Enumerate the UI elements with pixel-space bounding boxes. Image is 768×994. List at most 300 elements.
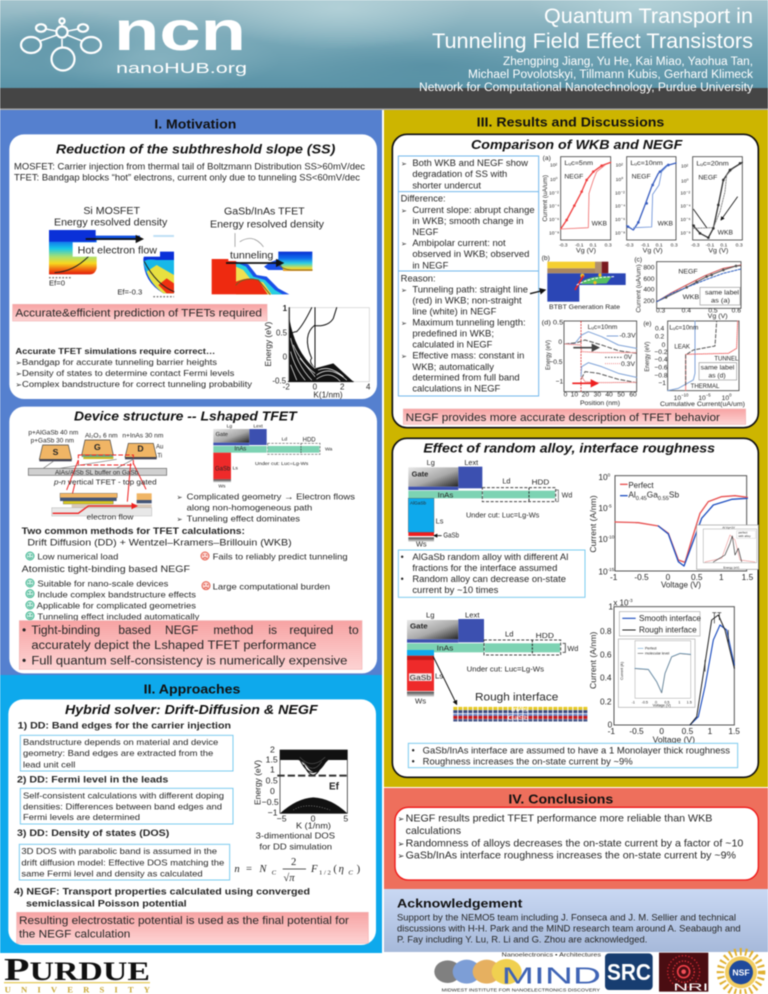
step 3: density of states: same Fermi level and density as calculated (21, 869, 203, 879)
legend (619, 612, 702, 636)
figure: L-shaped TFET geometry: Under cut: Luc=Lg-Ws (255, 461, 309, 467)
panel Luc=20nm: 10⁻² (680, 190, 691, 196)
chart: complex band structure: 1 (283, 304, 288, 313)
chart: current vs voltage, roughness: 1.5 (728, 726, 740, 736)
panel Luc=10nm: 0.3 (671, 243, 678, 249)
figure: vertical TFET schematic: Al₂O₃ 6 nm (85, 433, 118, 439)
chart (e): energy vs cumulative current: Cumulative Current(uA/um) (660, 401, 745, 408)
figure: GaSb L-shaped geometry: GaSb (410, 673, 431, 682)
step 2: Fermi level: Self-consistent calculations with different doping (23, 790, 224, 800)
figure: Si MOSFET energy resolved density: Hot electron flow (78, 245, 158, 256)
step 2: Fermi level: densities: Differences between band edges and (23, 801, 222, 811)
chart (e): energy vs cumulative current: 10 (722, 395, 729, 402)
panel Luc=10nm: 10² (616, 163, 623, 169)
logo: molecule icon (21, 18, 101, 70)
chart (e): energy vs cumulative current: same label (701, 364, 735, 371)
panel: II. Approaches (4, 681, 376, 994)
heading: I. Motivation: I. Motivation (154, 116, 236, 131)
chart: current vs voltage, roughness: Voltage (V) (653, 735, 695, 745)
text box: explanation: (red) in WKB; non-straight (412, 296, 522, 306)
step 2: Fermi level: Fermi levels are determined (23, 812, 140, 822)
chart: complex band structure: 0.5 (276, 329, 288, 338)
figure: AlGaSb L-shaped geometry (408, 458, 572, 549)
figure: rough interface lattice: GaSb (508, 715, 529, 722)
chart (a): current vs gate voltage (542, 155, 743, 255)
figure: GaSb/InAs TFET energy resolved density: GaSb/InAs TFET (224, 206, 305, 217)
text box: explanation: Reason: (401, 274, 436, 284)
chart (e): energy vs cumulative current: 0 (729, 393, 732, 398)
chart (c): current vs voltage: (c) (634, 257, 642, 264)
figure: vertical TFET schematic: p-n vertical TFET - top gated (53, 477, 157, 486)
panel: interface roughness (407, 598, 740, 768)
panel Luc=20nm: WKB (718, 229, 734, 236)
logo: NSF: NSF (732, 969, 750, 978)
inset: transmission spectrum: perfect (738, 530, 748, 534)
panel Luc=5nm: 10⁻⁴ (549, 204, 559, 210)
chart (e): energy vs cumulative current: −5 (706, 393, 711, 398)
callout: NEGF required: to (349, 623, 359, 637)
chart: current vs voltage, random alloy: 1.5 (742, 572, 754, 582)
figure: vertical TFET schematic: AlAs/AlSb SL buffer on GaSb (55, 470, 139, 476)
chart (c): current vs voltage: 0.6 (732, 307, 741, 314)
figure: GaSb L-shaped geometry: Ld (505, 630, 514, 639)
poster title: Quantum Transport in (544, 5, 753, 28)
chart: current vs voltage, random alloy: Perfect (628, 480, 654, 490)
callout: NEGF more accurate: NEGF provides more accurate description of TFET behavior (406, 412, 720, 424)
chart (d): energy vs position: Energy (eV) (545, 340, 552, 370)
chart (d): energy vs position: 0V (624, 354, 633, 361)
chart (d): energy vs position: −0.5 (549, 359, 563, 366)
panel Luc=10nm: -0.3 (625, 243, 634, 249)
panel Luc=10nm: 10⁻⁶ (615, 217, 625, 223)
chart (e): energy vs cumulative current: −0.4 (654, 356, 668, 363)
figure: GaSb L-shaped geometry: Under cut: Luc=Lg-Ws (467, 664, 544, 673)
figure: Si MOSFET energy resolved density: Si MOSFET (83, 206, 140, 217)
chart: current vs voltage, roughness: 0.2 (600, 696, 612, 706)
text box: roughness findings: • (412, 745, 415, 755)
panel Luc=20nm: 10⁻⁶ (680, 217, 691, 223)
chart: current vs voltage, roughness: -3 (628, 598, 633, 603)
figure: rough interface lattice: Rough interface (475, 692, 558, 704)
panel Luc=10nm: Vg (V) (643, 248, 663, 255)
panel Luc=10nm: 10⁰ (616, 177, 623, 183)
text box: roughness findings: Roughness increases the on-state current by ~9% (423, 756, 633, 766)
chart: band structure with Fermi level: for DD simulation (259, 841, 332, 851)
heading: IV. Conclusions: IV. Conclusions (508, 791, 613, 806)
callout: accurate prediction required: Accurate&efficient prediction of TFETs required (15, 308, 262, 320)
text: conclusions list: GaSb/InAs interface roughness increases the on-state current by ~9% (406, 851, 736, 862)
panel Luc=20nm: 10⁻⁸ (680, 230, 691, 236)
panel Luc=20nm: Lᵤc=20nm (696, 161, 729, 168)
step 3: density of states: 3D DOS with parabolic band is assumed in the (21, 846, 217, 856)
figure: vertical TFET schematic: G (94, 442, 101, 452)
chart: band structure with Fermi level: 1 (270, 765, 275, 775)
formula: carrier density: C (348, 870, 353, 877)
chart: current vs voltage, roughness: 0.4 (600, 673, 612, 683)
text: conclusions list: calculations (406, 826, 461, 837)
list: pros and cons: Suitable for nano-scale devices (37, 579, 168, 589)
panel Luc=20nm: 10⁰ (681, 178, 689, 184)
step 1: band edges: 1) DD: Band edges for the carrier injection (18, 720, 231, 730)
chart (c): current vs voltage: 0.3 (656, 307, 666, 314)
callout: NEGF required: Tight-binding (31, 623, 100, 637)
panel Luc=20nm: 0.3 (736, 243, 743, 249)
chart (c): current vs voltage: Vg (V) (708, 313, 728, 320)
figure: L-shaped TFET geometry: InAs (234, 447, 246, 453)
heading: reduction of the subthreshold slope: Reduction of the subthreshold slope (SS) (56, 142, 335, 157)
list: pros and cons (26, 552, 348, 622)
card: conclusions (395, 807, 758, 880)
callout: NEGF required: accurately depict the Lshaped TFET performance (31, 638, 317, 652)
panel: I. Motivation (9, 116, 377, 399)
panel Luc=5nm: 10⁰ (550, 177, 558, 183)
panel Luc=10nm: NEGF (632, 174, 651, 181)
heading: II. Approaches: II. Approaches (144, 681, 240, 696)
chart: current vs voltage, random alloy: 10 (598, 472, 608, 482)
text: conclusions list: Randomness of alloys decreases the on-state current by a factor of ~10 (406, 838, 744, 849)
logo: MIND: MIND (502, 962, 601, 988)
text: conclusions list (398, 814, 744, 862)
poster title: Tunneling Field Effect Transistors (432, 30, 753, 53)
text: MOSFET and TFET description: TFET: Bandgap blocks “hot” electrons, current only due to tunneling SS<60mV/dec (14, 173, 360, 183)
figure: vertical TFET schematic: Au (156, 444, 163, 450)
text box: explanation: in NEGF (412, 260, 449, 270)
chart: band structure with Fermi level: −0.5 (262, 797, 279, 807)
panel Luc=20nm: -0.3 (691, 243, 700, 249)
logo: MIND (434, 952, 601, 994)
logo: SRC (605, 953, 653, 990)
text: two common methods: Two common methods for TFET calculations: (22, 526, 245, 536)
figure: L-shaped TFET geometry: GaSb (215, 467, 231, 473)
text box: explanation: observed in WKB; observed (412, 249, 529, 259)
panel Luc=10nm: WKB (658, 221, 674, 228)
step 2: Fermi level (17, 775, 233, 824)
chart: current vs voltage, roughness: 0 (608, 719, 613, 729)
chart (e): energy vs cumulative current: 0 (662, 342, 666, 349)
step 4: NEGF (14, 886, 310, 909)
text: MOSFET and TFET description (14, 161, 365, 183)
panel Luc=5nm: 0.1 (590, 243, 597, 249)
chart: band structure with Fermi level: 5 (343, 814, 348, 824)
chart (e): energy vs cumulative current: 10 (698, 395, 706, 402)
panel Luc=5nm: Vg (V) (576, 248, 596, 255)
inset: perfect vs molecular level: Current (A) (620, 662, 624, 680)
figure: GaSb L-shaped geometry: Wd (567, 644, 578, 653)
text box: random alloy findings: AlGaSb random alloy with different Al (412, 552, 568, 562)
step 4: NEGF: semiclassical Poisson potential (26, 899, 187, 909)
figure: AlGaSb L-shaped geometry: InAs (438, 490, 454, 499)
figure: AlGaSb L-shaped geometry: Ls (436, 516, 444, 525)
text: MOSFET and TFET description: MOSFET: Carrier injection from thermal tail of Boltzmann Distribution SS>60mV/dec (14, 161, 365, 171)
text: simulation requirements: ➢Bandgap for accurate tunneling barrier heights (15, 357, 217, 367)
callout: accurate prediction required (13, 304, 267, 321)
callout: NEGF more accurate (403, 409, 746, 424)
formula: carrier density: F (310, 864, 318, 875)
text box: explanation: WKB; automatically (412, 362, 495, 372)
chart (e): energy vs cumulative current: LEAK (674, 344, 691, 351)
figure: AlGaSb L-shaped geometry: Gate (412, 470, 428, 479)
figure: vertical TFET schematic: D (137, 444, 144, 454)
text box: explanation: shorter undercut (412, 180, 482, 190)
inset: perfect vs molecular level: 1 (678, 700, 680, 704)
panel Luc=5nm: 10⁻⁸ (549, 230, 559, 236)
panel Luc=5nm: 10⁻² (549, 190, 559, 196)
figure: vertical TFET schematic: p+AlGaSb 40 nm (28, 430, 78, 436)
chart: current vs voltage, roughness: 1 (708, 726, 713, 736)
panel Luc=5nm: NEGF (564, 174, 583, 181)
chart: current vs voltage, random alloy: Current (A/nm) (588, 495, 598, 553)
chart (d): energy vs position: −1 (556, 378, 564, 385)
inset: perfect vs molecular level: 0.5 (664, 700, 669, 704)
figure: Si MOSFET energy resolved density: Ef=0 (49, 278, 65, 287)
text: acknowledgement: discussions with H-H. Park and the MIND research team around A. Seabaugh and (397, 923, 741, 933)
chart (e): energy vs cumulative current: −10 (681, 393, 689, 398)
chart: current vs voltage, roughness: 0.8 (600, 626, 612, 636)
chart (e): energy vs cumulative current: TUNNEL (714, 355, 739, 362)
inset: perfect vs molecular level: -1 (632, 700, 635, 704)
chart (c): current vs voltage: 0.4 (682, 307, 691, 314)
chart (d): energy vs position: Lᵤc=10nm (588, 324, 618, 331)
chart (c): current vs voltage: as (a) (711, 297, 730, 304)
text: conclusions list: ➢ (398, 815, 405, 824)
chart: current vs voltage, random alloy: Ga (647, 489, 658, 499)
heading: acknowledgement: Acknowledgement (397, 896, 522, 910)
chart: current vs voltage, random alloy: 10 (598, 566, 608, 576)
chart (c): current vs voltage: 200 (643, 298, 655, 305)
text: geometry bullets: Complicated geometry → Electron flows (187, 491, 356, 501)
text box: roughness findings: • (412, 756, 415, 766)
chart: current vs voltage, roughness: Current (A/nm) (588, 631, 598, 689)
panel Luc=20nm: Vg (V) (708, 248, 728, 255)
card: device structure (9, 407, 377, 673)
authors and affiliation: Michael Povolotskyi, Tillmann Kubis, Gerhard Klimeck (468, 69, 753, 81)
figure: L-shaped TFET geometry: Lg (227, 423, 232, 429)
text box: explanation: Both WKB and NEGF show (412, 158, 529, 168)
text box: explanation: ➢ (401, 207, 407, 215)
figure: vertical TFET schematic: electron flow (87, 512, 134, 521)
inset: perfect vs molecular level: 0 (655, 700, 657, 704)
panel: III. Results and Discussions (392, 116, 758, 428)
chart: current vs voltage, random alloy: Voltage (V) (661, 580, 701, 590)
chart (c): current vs voltage: NEGF (678, 268, 698, 275)
inset: perfect vs molecular level: molecular level (645, 652, 670, 656)
inset: perfect vs molecular level (618, 639, 695, 708)
figure: L-shaped TFET geometry (213, 423, 333, 489)
chart (b): BTBT generation rate (530, 255, 626, 311)
figure: GaSb L-shaped geometry: Gate (410, 621, 428, 630)
chart: current vs voltage, random alloy: -15 (608, 567, 615, 572)
text box: random alloy findings: Random alloy can decrease on-state (412, 574, 566, 584)
text box: explanation: Tunneling path: straight line (412, 285, 528, 295)
chart: current vs voltage, random alloy: 0 (608, 473, 611, 478)
text box: random alloy findings (398, 550, 585, 597)
chart: complex band structure: Energy (eV) (264, 321, 273, 367)
figure: AlGaSb L-shaped geometry: AlGaSb (410, 500, 426, 505)
step 3: density of states: drift diffusion model: Effective DOS matching the (21, 858, 225, 868)
chart (e): energy vs cumulative current: (e) (643, 320, 651, 327)
step 1: band edges: geometry: Band edges are extracted from the (23, 748, 214, 758)
figure: AlGaSb L-shaped geometry: GaSb (443, 530, 459, 539)
chart (e): energy vs cumulative current (643, 320, 745, 408)
chart: band structure with Fermi level: 0 (311, 814, 316, 824)
step 3: density of states (17, 828, 230, 880)
text: simulation requirements: ➢Density of states to determine contact Fermi levels (15, 368, 234, 378)
panel Luc=20nm: NEGF (698, 175, 717, 182)
chart (d): energy vs position (542, 319, 637, 407)
heading: effect of random alloy: Effect of random alloy, interface roughness (423, 442, 715, 456)
chart: band structure with Fermi level: 2 (270, 744, 275, 754)
figure: L-shaped TFET geometry: Ws (218, 483, 226, 489)
chart: complex band structure: 4 (366, 382, 371, 391)
chart (e): energy vs cumulative current: THERMAL (691, 383, 720, 390)
chart (e): energy vs cumulative current: −0.6 (654, 364, 668, 371)
chart (c): current vs voltage: WKB (683, 294, 700, 301)
chart (b): BTBT generation rate: (b) (542, 255, 550, 262)
card: subthreshold slope (9, 134, 377, 399)
figure: GaSb L-shaped geometry: Ls (435, 671, 443, 680)
chart (d): energy vs position: 30 (594, 392, 601, 399)
chart: current vs voltage, roughness: -1 (608, 726, 615, 736)
figure: L-shaped TFET geometry: HDD (303, 438, 316, 444)
step 1: band edges: lead unit cell (23, 759, 75, 769)
text: geometry bullets: Tunneling effect dominates (187, 513, 301, 523)
callout: NEGF required: is (268, 623, 277, 637)
chart (d): energy vs position: -0.3V (619, 332, 636, 339)
panel Luc=10nm: 10⁻² (615, 190, 625, 196)
text: simulation requirements: Accurate TFET simulations require correct… (15, 346, 215, 356)
panel Luc=5nm: 10² (550, 163, 558, 169)
inset: perfect vs molecular level: -0.5 (642, 700, 648, 704)
callout: electrostatic potential (17, 912, 368, 943)
text: two common methods: Atomistic tight-binding based NEGF (22, 564, 191, 574)
text box: random alloy findings: • (401, 552, 404, 562)
chart: band structure with Fermi level: −5 (277, 814, 287, 824)
figure: GaSb L-shaped geometry (407, 610, 578, 705)
inset: transmission spectrum: with alloy (738, 534, 751, 538)
panel Luc=20nm: 10² (681, 164, 689, 170)
legend: Smooth interface (639, 614, 702, 623)
chart: current vs voltage, random alloy: 0.45 (636, 496, 647, 502)
text box: random alloy findings: fractions for the interface assumed (412, 563, 557, 573)
panel: device structure (9, 407, 377, 673)
authors and affiliation: Network for Computational Nanotechnology, Purdue University (419, 82, 753, 94)
chart: band structure with Fermi level: Energy (eV) (252, 760, 262, 805)
step 1: band edges (18, 720, 233, 771)
text: simulation requirements: ➢Complex bandstructure for correct tunneling probability (15, 379, 253, 389)
chart (b): BTBT generation rate: BTBT Generation Rate (549, 304, 620, 311)
formula: carrier density: √π (283, 872, 295, 884)
text box: explanation: ➢ (401, 240, 407, 248)
chart (c): current vs voltage: 400 (643, 287, 655, 294)
chart: current vs voltage, random alloy (588, 472, 758, 590)
text: acknowledgement (397, 912, 741, 944)
chart: complex band structure: -2 (283, 382, 290, 391)
nanoHUB logo (21, 0, 247, 77)
panel Luc=5nm: WKB (592, 221, 608, 228)
chart (d): energy vs position: 0.3V (621, 361, 636, 368)
text box: explanation: ➢ (401, 287, 407, 295)
text box: roughness findings (408, 743, 738, 768)
formula: carrier density: = (246, 864, 252, 875)
chart: current vs voltage, random alloy: -0.5 (634, 572, 649, 582)
figure: vertical TFET schematic: p+GaSb 30 nm (31, 438, 74, 444)
text: simulation requirements (15, 346, 253, 389)
chart (e): energy vs cumulative current: 0.2 (655, 334, 665, 341)
figure: L-shaped TFET geometry: Ld (282, 437, 287, 443)
formula: carrier density: N (258, 864, 267, 875)
text box: explanation (398, 156, 539, 396)
panel Luc=5nm: 0.3 (605, 243, 612, 249)
heading: comparison: Comparison of WKB and NEGF (471, 138, 683, 152)
panel: results lower figures (392, 255, 758, 777)
callout: NEGF required: NEGF (165, 623, 198, 637)
chart: current vs voltage, roughness: 1 (608, 601, 613, 611)
formula: carrier density: ( (333, 864, 337, 875)
authors and affiliation (419, 56, 753, 94)
panel Luc=20nm: 10⁻⁴ (680, 204, 691, 210)
chart: band structure with Fermi level: K (1/nm) (296, 820, 331, 830)
text: geometry bullets: ➢ (177, 515, 183, 523)
text box: explanation: determined from full band (412, 373, 520, 383)
panel Luc=5nm (549, 157, 612, 255)
chart (e): energy vs cumulative current: 10 (674, 395, 681, 402)
chart: current vs voltage, roughness: -0.5 (629, 726, 644, 736)
logo: Purdue University: PURDUE (4, 951, 150, 987)
chart (e): energy vs cumulative current: −0.2 (654, 349, 668, 356)
panel Luc=10nm: 10⁻⁸ (615, 230, 625, 236)
chart: complex band structure: 2 (340, 382, 345, 391)
text box: explanation: Difference: (401, 194, 446, 204)
figure: AlGaSb L-shaped geometry: Wd (562, 490, 572, 499)
panel Luc=10nm (615, 157, 678, 255)
chart: complex band structure: 0 (283, 353, 288, 362)
figure: GaSb L-shaped geometry: HDD (536, 631, 555, 640)
inset: transmission spectrum: Al Vg=1V (722, 525, 735, 529)
card: comparison of WKB and NEGF (392, 134, 758, 428)
formula: carrier density: C (272, 870, 277, 877)
chart: current vs voltage, random alloy: -5 (608, 504, 612, 509)
list: pros and cons: Include complex bandstructure effects (37, 590, 196, 600)
text box: explanation: predefined in WKB; (412, 329, 494, 339)
figure: AlGaSb L-shaped geometry: Lg (427, 458, 435, 467)
figure: AlGaSb L-shaped geometry: Ld (502, 476, 510, 485)
chart: band structure with Fermi level: 0 (270, 786, 275, 796)
panel Luc=5nm: -0.1 (575, 243, 584, 249)
chart (c): current vs voltage (634, 257, 741, 320)
figure: rough interface lattice: InAs (511, 707, 528, 714)
header banner (0, 0, 768, 110)
figure: Si MOSFET energy resolved density: Energy resolved density (54, 218, 167, 229)
figure: GaSb L-shaped geometry: Lext (465, 610, 480, 619)
callout: NEGF required: • (22, 653, 26, 667)
panel Luc=20nm (680, 157, 743, 255)
chart (c): current vs voltage: 800 (643, 265, 655, 272)
text: two common methods: Drift Diffusion (DD) + Wentzel–Kramers–Brillouin (WKB) (27, 538, 292, 548)
figure: AlGaSb L-shaped geometry: HDD (532, 478, 549, 487)
text: geometry bullets: ➢ (177, 493, 183, 501)
callout: electrostatic potential: Resulting electrostatic potential is used as the final potential for (19, 915, 349, 927)
step 3: density of states: 3) DD: Density of states (DOS) (17, 828, 169, 838)
logo: NRI: NRI (673, 982, 708, 993)
inset: perfect vs molecular level: Voltage (V) (653, 704, 671, 708)
logo: NSF (720, 952, 762, 993)
chart: complex band structure: -0.5 (272, 377, 287, 386)
text: acknowledgement: P. Fay including Y. Lu, R. Li and G. Zhou are acknowledged. (397, 934, 647, 944)
chart (e): energy vs cumulative current: 0.4 (655, 326, 665, 333)
chart: current vs voltage, random alloy: Al (628, 489, 636, 499)
logo: NRI (659, 953, 708, 993)
chart: current vs voltage, random alloy: 0 (666, 572, 671, 582)
